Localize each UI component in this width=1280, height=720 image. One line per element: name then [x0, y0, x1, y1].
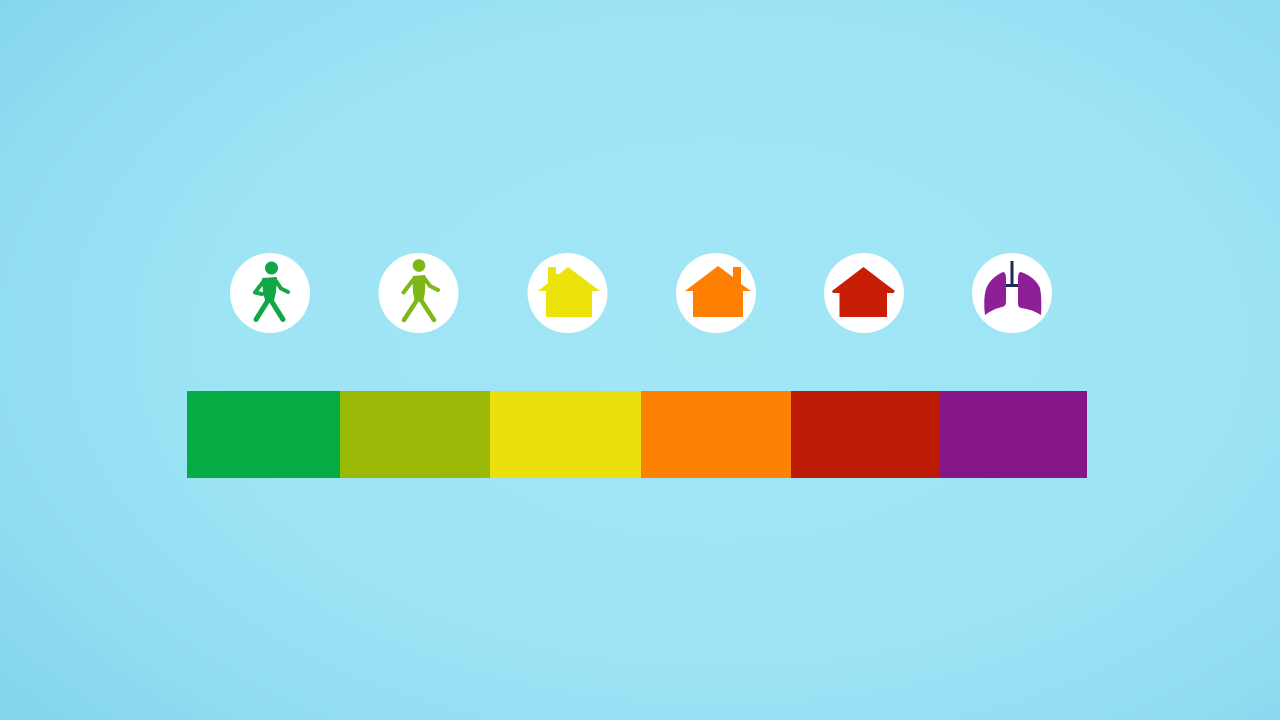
- segment: orange: [641, 391, 792, 478]
- segment: purple: [940, 391, 1087, 478]
- icon: purple lungs: [972, 253, 1052, 333]
- colour scale bar: [187, 391, 1087, 478]
- icon: red house: [824, 253, 904, 333]
- segment: yellow: [490, 391, 642, 478]
- segment: red: [791, 391, 940, 478]
- icon: green walking person: [230, 253, 310, 333]
- segment: lime: [340, 391, 490, 478]
- icon: lime walking person: [378, 253, 458, 333]
- segment: green: [187, 391, 340, 478]
- icon: yellow house: [528, 253, 608, 333]
- icon row: [230, 253, 1052, 333]
- icon: orange house: [676, 253, 756, 333]
